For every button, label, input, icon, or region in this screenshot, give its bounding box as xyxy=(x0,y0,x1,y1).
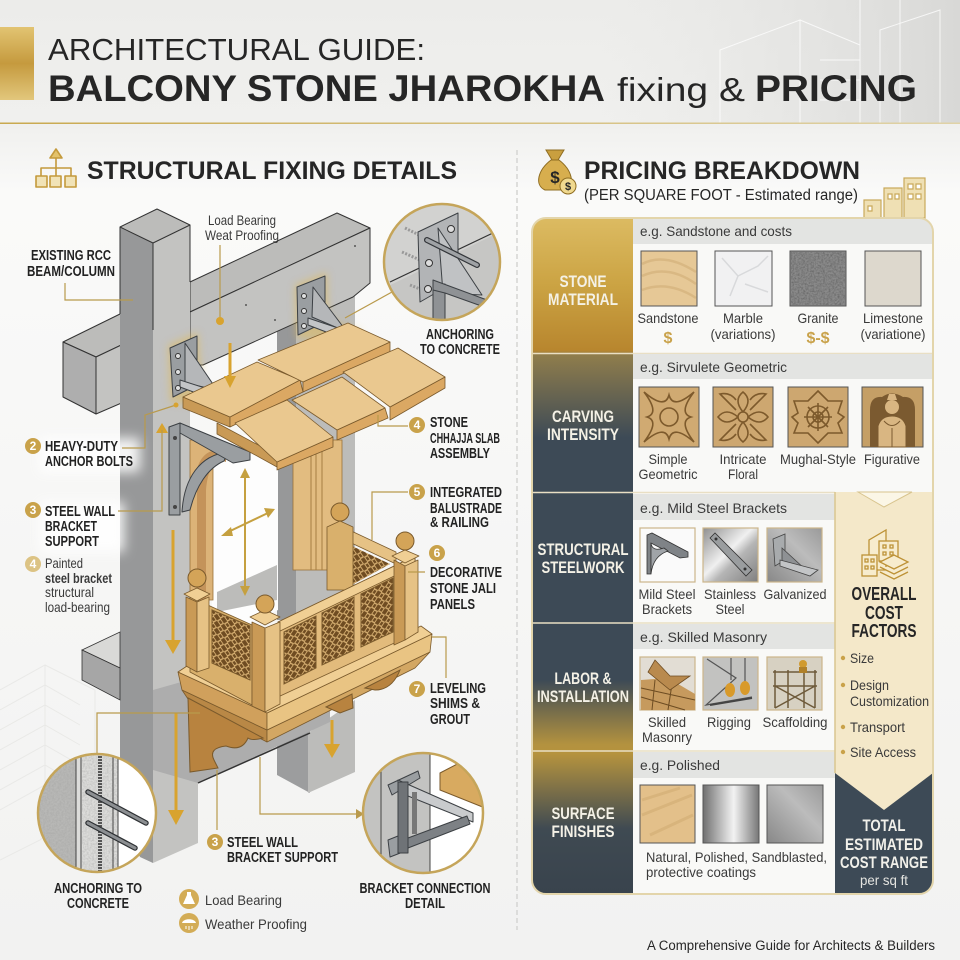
stone labels: $-$ xyxy=(806,330,830,347)
tile: mughal style xyxy=(788,387,848,447)
tile: figurative xyxy=(862,387,923,447)
row label: labor and installation xyxy=(537,669,629,706)
right stone pilaster xyxy=(293,440,342,570)
icon: money bag: $ xyxy=(550,168,560,187)
label: steel wall bracket support: SUPPORT xyxy=(45,534,99,550)
surface caption: protective coatings xyxy=(646,864,756,880)
footer note: A Comprehensive Guide for Architects & Builders xyxy=(647,938,935,953)
labor labels xyxy=(642,714,828,745)
label: integrated balustrade: 5 xyxy=(414,485,421,499)
panel: overall cost factors xyxy=(835,492,933,894)
label: decorative jali panels xyxy=(429,545,502,613)
label: painted steel bracket xyxy=(25,555,112,615)
label: steel wall bracket bottom: 3 xyxy=(212,835,219,849)
row label: carving intensity: INTENSITY xyxy=(547,425,620,444)
table border xyxy=(532,218,933,894)
cost factor list: Transport xyxy=(850,719,905,735)
swatch: scaffolding xyxy=(767,657,822,710)
surface caption xyxy=(646,849,827,880)
steel labels xyxy=(638,586,826,617)
label: integrated balustrade: INTEGRATED xyxy=(430,485,502,501)
swatch: rigging xyxy=(703,657,758,710)
heading: structural fixing details: STRUCTURAL FIXING DETAILS xyxy=(87,157,457,185)
total estimated cost range xyxy=(840,816,928,888)
label: anchoring to concrete top: ANCHORING xyxy=(426,327,494,343)
steel labels: Mild Steel xyxy=(638,586,696,602)
swatch: limestone xyxy=(865,251,921,306)
carving labels: Intricate xyxy=(720,451,767,467)
steel labels: Brackets xyxy=(642,601,692,617)
back rail xyxy=(327,503,396,590)
label: stone chhajja slab: CHHAJJA SLAB xyxy=(430,431,500,447)
cost factor list: Site Access xyxy=(850,744,916,760)
title: fixing & xyxy=(617,71,745,108)
row heading: steel: e.g. Mild Steel Brackets xyxy=(640,500,787,516)
row label: stone material: STONE xyxy=(560,272,606,291)
overall cost factors heading: COST xyxy=(865,603,903,623)
labor labels: Skilled xyxy=(648,714,686,730)
header rule xyxy=(0,122,960,124)
row label: stone material: MATERIAL xyxy=(548,290,618,309)
row heading: surface: e.g. Polished xyxy=(640,757,720,773)
icon: buildings and stone stack xyxy=(862,530,908,579)
label: painted steel bracket: structural xyxy=(45,584,94,600)
railing right wall xyxy=(278,556,418,697)
label: load bearing weat proofing: Load Bearing xyxy=(208,212,276,228)
stone labels: Limestone xyxy=(863,310,923,326)
row heading: stone: e.g. Sandstone and costs xyxy=(640,223,792,239)
label: integrated balustrade: BALUSTRADE xyxy=(430,501,502,517)
swatch: skilled masonry xyxy=(640,657,695,710)
left stone pilaster xyxy=(190,440,226,600)
lower ring beam xyxy=(82,632,330,783)
label: steel wall bracket bottom: BRACKET SUPPORT xyxy=(227,850,338,866)
swatch: sandblasted finish xyxy=(767,785,823,843)
label: integrated balustrade xyxy=(409,484,502,531)
total estimated cost range: per sq ft xyxy=(860,872,908,888)
label: decorative jali panels: STONE JALI xyxy=(430,581,496,597)
row label: carving intensity: CARVING xyxy=(552,407,614,426)
row label: surface finishes xyxy=(552,804,614,841)
label: steel wall bracket support xyxy=(25,502,115,550)
legend: Weather Proofing xyxy=(205,916,307,932)
row label: labor and installation: INSTALLATION xyxy=(537,687,629,706)
labor labels: Masonry xyxy=(642,729,692,745)
callout lines xyxy=(65,245,446,830)
label: leveling shims: GROUT xyxy=(430,712,470,728)
label: stone chhajja slab xyxy=(409,415,500,462)
label: painted steel bracket: Painted xyxy=(45,555,83,571)
total estimated cost range: COST RANGE xyxy=(840,853,928,872)
label: stone chhajja slab: STONE xyxy=(430,415,468,431)
label: painted steel bracket: load-bearing xyxy=(45,599,110,615)
label: integrated balustrade: & RAILING xyxy=(430,515,489,531)
stone labels: Granite xyxy=(798,310,839,326)
posts and finials xyxy=(184,532,419,712)
label: bracket connection detail xyxy=(360,881,490,912)
stone labels xyxy=(638,310,926,347)
icon: money bag xyxy=(539,150,576,194)
label: decorative jali panels: 6 xyxy=(434,546,441,560)
swatch: granite xyxy=(790,251,846,306)
label: load bearing weat proofing: Weat Proofing xyxy=(205,227,279,243)
carving labels: Floral xyxy=(728,466,758,482)
row label: structural steelwork: STRUCTURAL xyxy=(538,540,628,559)
label: painted steel bracket: steel bracket xyxy=(45,570,112,586)
floor inside opening xyxy=(217,565,277,612)
swatch: stainless steel xyxy=(703,528,758,582)
title: PRICING xyxy=(755,68,917,109)
label: load bearing weat proofing xyxy=(205,212,279,243)
tile: intricate floral xyxy=(713,387,773,447)
row label: carving intensity xyxy=(547,407,620,444)
row label: surface finishes: FINISHES xyxy=(552,822,614,841)
overall cost factors heading: OVERALL xyxy=(852,584,916,604)
label: decorative jali panels: DECORATIVE xyxy=(430,565,502,581)
back block below balcony xyxy=(277,700,355,793)
row label: structural steelwork xyxy=(538,540,628,577)
anchor bracket right xyxy=(295,272,362,344)
row label: labor and installation: LABOR & xyxy=(554,669,612,688)
cost factor list: Size xyxy=(850,650,874,666)
pricing table xyxy=(532,218,933,894)
heading: pricing breakdown: PRICING BREAKDOWN xyxy=(584,157,860,185)
label: leveling shims xyxy=(409,681,486,728)
carving labels: Simple xyxy=(648,451,688,467)
title: ARCHITECTURAL GUIDE: xyxy=(48,32,425,67)
swatch: mild steel bracket xyxy=(640,528,695,582)
title: BALCONY STONE JHAROKHA xyxy=(48,68,605,109)
icon: money bag: $ xyxy=(565,181,571,193)
label: anchoring to concrete bottom: ANCHORING TO xyxy=(54,881,142,897)
swatch: galvanized xyxy=(767,528,822,582)
row heading: carving: e.g. Sirvulete Geometric xyxy=(640,359,787,375)
labor labels: Scaffolding xyxy=(762,714,828,730)
label: stone chhajja slab: ASSEMBLY xyxy=(430,446,490,462)
cost factor list xyxy=(841,650,929,760)
row label: structural steelwork: STEELWORK xyxy=(542,558,625,577)
total estimated cost range: ESTIMATED xyxy=(845,835,923,854)
title xyxy=(48,32,917,109)
carving labels xyxy=(638,451,920,482)
total estimated cost range: TOTAL xyxy=(862,816,906,835)
label: leveling shims: 7 xyxy=(414,682,421,696)
label: bracket connection detail: DETAIL xyxy=(405,896,445,912)
cost factor list: Customization xyxy=(850,693,929,709)
overall cost factors heading: FACTORS xyxy=(852,621,916,641)
label: bracket connection detail: BRACKET CONNECTION xyxy=(360,881,490,897)
label halos xyxy=(40,438,140,552)
label: anchoring to concrete bottom: CONCRETE xyxy=(67,896,129,912)
header accent block xyxy=(0,27,34,100)
carving labels: Geometric xyxy=(638,466,698,482)
balcony base ledges xyxy=(178,626,432,742)
label: steel wall bracket bottom xyxy=(207,834,338,866)
opening behind balcony xyxy=(212,430,278,640)
structural illustration xyxy=(63,209,445,863)
back column xyxy=(277,293,355,620)
steel labels: Galvanized xyxy=(764,586,826,602)
label: anchoring to concrete top xyxy=(420,327,500,358)
section divider xyxy=(516,150,518,930)
corbel xyxy=(188,670,400,772)
label: anchoring to concrete top: TO CONCRETE xyxy=(420,342,500,358)
label: anchoring to concrete bottom xyxy=(54,881,142,912)
anchor bracket left xyxy=(168,332,236,408)
inset: bracket connection xyxy=(363,750,490,880)
label: steel wall bracket bottom: STEEL WALL xyxy=(227,835,298,851)
label: existing RCC: EXISTING RCC xyxy=(31,248,111,264)
label: decorative jali panels: PANELS xyxy=(430,597,475,613)
overall cost factors heading xyxy=(852,584,916,641)
lower steel bracket xyxy=(169,423,250,515)
carving labels: Figurative xyxy=(864,451,920,467)
steel labels: Stainless xyxy=(704,586,756,602)
inset: anchoring to concrete (top) xyxy=(380,204,500,330)
label: leveling shims: SHIMS & xyxy=(430,696,480,712)
label: existing RCC: BEAM/COLUMN xyxy=(27,264,115,280)
row heading: labor: e.g. Skilled Masonry xyxy=(640,629,767,645)
label: steel wall bracket support: 3 xyxy=(30,503,37,517)
legend: Load Bearing xyxy=(205,892,282,908)
upper beam xyxy=(190,213,370,365)
cost factor list: Design xyxy=(850,677,889,693)
heading: pricing breakdown xyxy=(584,157,860,204)
railing left wall xyxy=(190,597,252,705)
label: anchor bolts: HEAVY-DUTY xyxy=(45,439,118,455)
swatch: polished finish xyxy=(703,785,759,843)
inset: anchoring to concrete (bottom) xyxy=(35,750,156,880)
swatch: marble xyxy=(715,251,772,306)
heading: pricing breakdown: (PER SQUARE FOOT - Estimated range) xyxy=(584,187,858,204)
icon: small buildings xyxy=(864,178,925,218)
labor labels: Rigging xyxy=(707,714,751,730)
label: anchor bolts: 2 xyxy=(30,439,37,453)
label: steel wall bracket support: BRACKET xyxy=(45,519,97,535)
stone chhajja slabs xyxy=(183,323,445,470)
surface caption: Natural, Polished, Sandblasted, xyxy=(646,849,827,865)
steel labels: Steel xyxy=(716,601,744,617)
label: existing RCC xyxy=(27,248,115,280)
icon: hierarchy xyxy=(36,149,76,187)
label: leveling shims: LEVELING xyxy=(430,681,486,697)
row label: surface finishes: SURFACE xyxy=(552,804,614,823)
label: painted steel bracket: 4 xyxy=(30,557,37,571)
swatch: natural finish xyxy=(640,785,695,843)
stone labels: Sandstone xyxy=(638,310,699,326)
stone labels: (variations) xyxy=(710,326,776,342)
label: anchor bolts xyxy=(25,438,133,470)
left beam xyxy=(63,314,170,414)
main column xyxy=(120,209,198,863)
legend xyxy=(179,889,307,933)
swatch: sandstone xyxy=(641,251,697,306)
label: steel wall bracket support: STEEL WALL xyxy=(45,504,115,520)
stone labels: $ xyxy=(664,330,673,347)
row label: stone material xyxy=(548,272,618,309)
category column xyxy=(532,218,933,894)
carving labels: Mughal-Style xyxy=(780,451,856,467)
load arrows xyxy=(156,343,340,825)
tile: simple geometric xyxy=(639,387,699,447)
stone labels: (variatione) xyxy=(860,326,926,342)
label: stone chhajja slab: 4 xyxy=(414,418,421,432)
stone labels: Marble xyxy=(723,310,763,326)
label: anchor bolts: ANCHOR BOLTS xyxy=(45,454,133,470)
